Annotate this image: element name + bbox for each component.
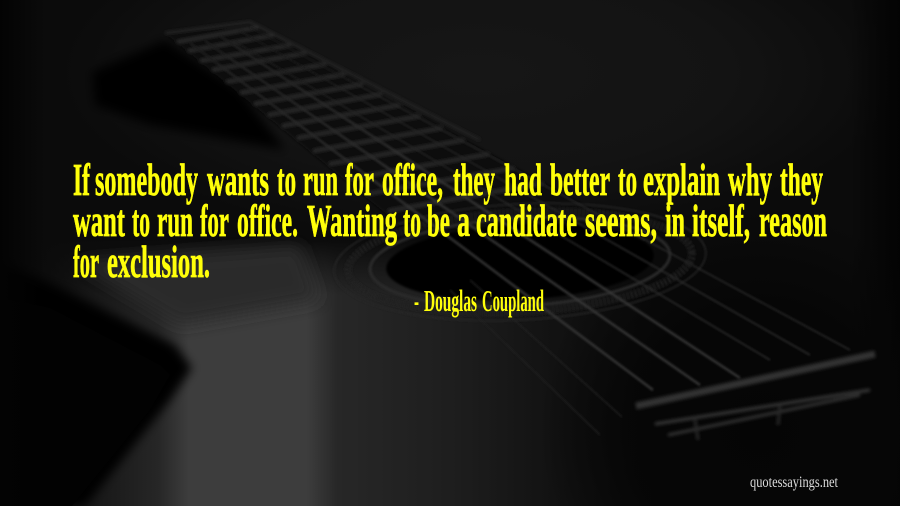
quote text: for	[200, 195, 229, 246]
quote text: office,	[382, 154, 443, 205]
quote text: to	[132, 195, 150, 246]
quote text: a	[457, 195, 470, 246]
quote text: run	[303, 154, 338, 205]
black wedge at lower left	[0, 262, 192, 506]
quote text: why	[728, 154, 772, 205]
quote text: better	[550, 154, 610, 205]
quote text: want	[73, 195, 125, 246]
text: Coupland	[482, 283, 544, 318]
quote text: had	[504, 154, 542, 205]
quote text: be	[427, 195, 450, 246]
quote text: reason	[759, 195, 827, 246]
inner black wedge	[0, 298, 170, 506]
quote text: they	[453, 154, 495, 205]
quote text: for	[73, 236, 99, 287]
quote text: If	[73, 154, 90, 205]
attribution: -	[414, 283, 419, 318]
quote text: itself,	[692, 195, 750, 246]
quote text: exclusion.	[107, 236, 210, 287]
attribution: Douglas	[424, 283, 477, 318]
guitar headstock shadow	[92, 40, 285, 150]
quote text: somebody	[95, 154, 198, 205]
watermark: quotessayings.net	[750, 474, 838, 491]
quote text: to	[403, 195, 421, 246]
quote text: to	[277, 154, 296, 205]
soft upper glow	[0, 0, 900, 300]
soundhole	[384, 217, 656, 307]
guitar body light area	[0, 240, 660, 506]
quote text: they	[780, 154, 823, 205]
guitar bridge and saddle	[636, 354, 875, 440]
quote text: in	[665, 195, 685, 246]
quote text: candidate	[476, 195, 577, 246]
quote text: run	[157, 195, 193, 246]
quote text: explain	[643, 154, 720, 205]
guitar strings	[190, 27, 850, 435]
quote text: wants	[207, 154, 269, 205]
guitar fretboard	[165, 22, 650, 242]
quote text: Wanting	[307, 195, 397, 246]
quote text: to	[618, 154, 637, 205]
quote text	[73, 154, 827, 287]
quote text: office.	[237, 195, 298, 246]
soundhole rosette	[331, 194, 709, 330]
quote text: seems,	[585, 195, 657, 246]
quote text: for	[345, 154, 374, 205]
